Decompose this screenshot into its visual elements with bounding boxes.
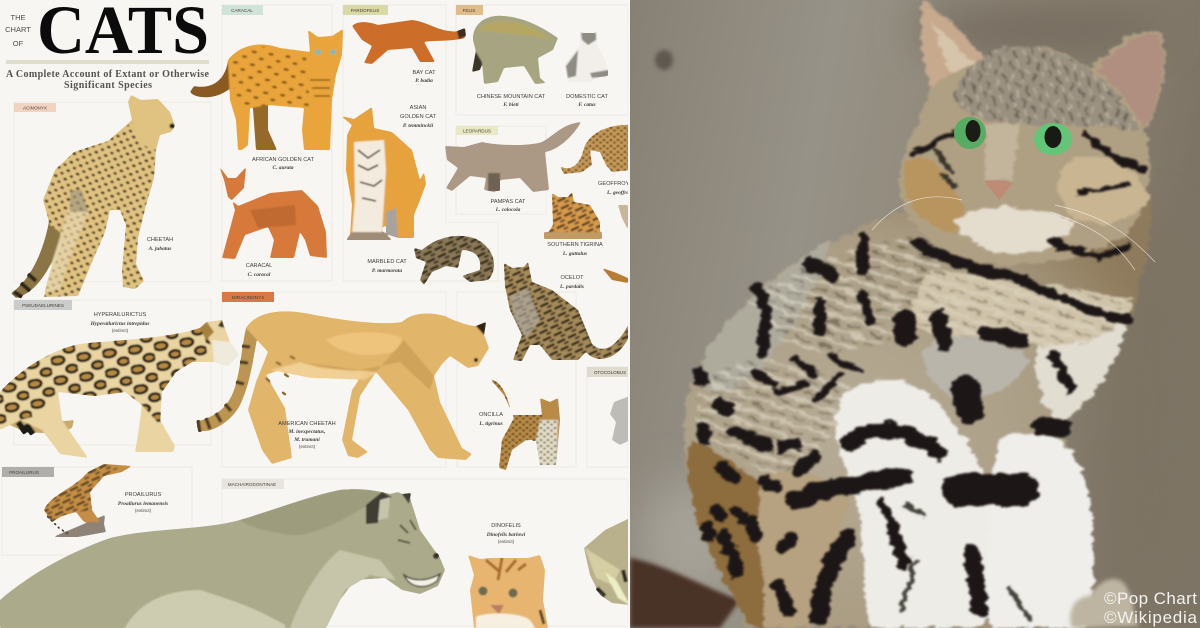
illustration: domestic cat	[565, 29, 608, 82]
subtitle: A Complete Account of Extant or Otherwise	[6, 69, 210, 80]
label: Asian golden cat: GOLDEN CAT	[400, 114, 437, 120]
label: Dinofelis: (extinct)	[498, 539, 515, 544]
cat nose	[984, 180, 1013, 200]
label: ocelot: L. pardalis	[559, 284, 584, 290]
photo: wooden branch	[630, 558, 740, 628]
label: Hyperailurictus	[90, 312, 149, 333]
label: Geoffroy's cat	[598, 181, 628, 195]
photo: paw at lower right	[1070, 579, 1140, 628]
label: oncilla: L. tigrinus	[478, 421, 503, 427]
label: southern tigrina: SOUTHERN TIGRINA	[547, 242, 603, 248]
illustration: Proailurus	[44, 464, 132, 537]
label: Proailurus	[118, 492, 168, 513]
illustration: Geoffroy's cat	[560, 125, 630, 174]
label: domestic cat: DOMESTIC CAT	[566, 94, 609, 100]
cat eyes	[954, 117, 1072, 155]
label: pampas cat: L. colocola	[495, 207, 521, 213]
taxonomy tags: PROAILURUS	[9, 470, 39, 475]
credit text: ©Pop Chart	[1104, 589, 1197, 608]
label: Proailurus: PROAILURUS	[125, 492, 161, 498]
illustration: ocelot	[504, 262, 630, 361]
cat stripes	[698, 134, 1142, 620]
label: Dinofelis: Dinofelis barlowi	[486, 532, 526, 538]
taxonomy tags: FELIS	[463, 8, 475, 13]
label: Hyperailurictus: Hyperailurictus intrepidus	[90, 321, 149, 327]
poster panel: chart of cats	[0, 0, 634, 628]
taxonomy tags: LEOPARDUS	[463, 128, 491, 134]
taxonomy tags: CARACAL	[231, 8, 253, 13]
label: pampas cat: PAMPAS CAT	[491, 199, 526, 205]
label: African golden cat	[252, 157, 314, 169]
illustration: Chinese mountain cat	[472, 16, 558, 84]
illustration: Pallas's cat fragment	[610, 396, 628, 445]
label: bay cat: P. badia	[415, 78, 433, 84]
label: Geoffroy's cat: L. geoffroyi	[606, 190, 633, 196]
illustration: cheetah	[11, 95, 175, 298]
illustration: caracal	[219, 166, 327, 259]
label: Dinofelis: DINOFELIS	[491, 523, 521, 529]
title: The Chart of Cats: CHART	[5, 25, 31, 34]
illustration: marbled cat	[414, 236, 494, 285]
label: cheetah: CHEETAH	[147, 237, 173, 243]
illustration: pampas cat	[445, 122, 581, 192]
label: domestic cat	[566, 94, 608, 106]
cat body	[684, 200, 1152, 628]
label: American cheetah	[278, 421, 336, 449]
label: Hyperailurictus: (extinct)	[112, 328, 129, 333]
taxonomy tags: PSEUDAELURINES	[22, 303, 64, 308]
label: Dinofelis	[486, 523, 526, 544]
label: Asian golden cat: ASIAN	[410, 105, 426, 111]
label: African golden cat: AFRICAN GOLDEN CAT	[252, 157, 315, 163]
illustration: southern tigrina	[544, 192, 602, 239]
taxonomy tags: MACHAIRODONTINAE	[228, 482, 276, 487]
label: bay cat	[412, 70, 436, 82]
cat head	[899, 1, 1165, 265]
label: Proailurus: Proailurus lemanensis	[118, 501, 168, 507]
label: bay cat: BAY CAT	[412, 70, 436, 76]
label: caracal	[246, 263, 272, 276]
label: American cheetah: M. inexpectatus,	[288, 429, 325, 435]
taxonomy tags: ACINONYX	[23, 106, 47, 110]
photo: black-footed cat	[684, 1, 1165, 628]
illustration: saber-toothed skull fragment	[584, 518, 630, 605]
label: Hyperailurictus: HYPERAILURICTUS	[94, 312, 147, 318]
label: African golden cat: C. aurata	[273, 165, 294, 171]
illustration: Dinofelis head	[468, 555, 548, 628]
title: The Chart of Cats: OF	[13, 39, 24, 48]
illustration: American cheetah	[197, 311, 489, 464]
label: marbled cat: MARBLED CAT	[367, 259, 407, 265]
taxonomy tags	[2, 5, 628, 489]
label: American cheetah: AMERICAN CHEETAH	[278, 421, 336, 427]
label: oncilla: ONCILLA	[479, 412, 503, 418]
label: American cheetah: M. trumani	[293, 437, 320, 443]
label: pampas cat	[491, 199, 526, 211]
label: southern tigrina: L. guttulus	[562, 251, 587, 257]
label: cheetah	[147, 237, 173, 252]
illustration: Hyperailurictus	[0, 320, 239, 458]
label: caracal: C. caracal	[248, 272, 271, 278]
label: Proailurus: (extinct)	[135, 508, 152, 513]
illustration: partial feline at edge	[602, 205, 628, 283]
illustration: bay cat	[352, 20, 466, 64]
credit text: ©Wikipedia	[1104, 608, 1198, 627]
credit text	[1104, 589, 1198, 627]
label: Chinese mountain cat	[477, 94, 545, 106]
label: southern tigrina	[547, 242, 603, 257]
label: Chinese mountain cat: CHINESE MOUNTAIN CAT	[477, 94, 546, 100]
label: oncilla	[479, 412, 503, 426]
illustration: Asian golden cat	[341, 107, 426, 240]
taxonomy tags: MIRACINONYX	[232, 295, 264, 300]
photo background	[630, 0, 1200, 628]
taxonomy tags: PARDOFELIS	[351, 8, 379, 13]
subtitle: Significant Species	[64, 80, 152, 91]
label: Asian golden cat: P. temminckii	[403, 123, 434, 129]
label: marbled cat	[368, 259, 407, 272]
title: The Chart of Cats: THE	[10, 13, 26, 22]
label: ocelot: OCELOT	[560, 275, 584, 281]
label: Chinese mountain cat: F. bieti	[503, 102, 519, 108]
illustration: sabertooth Machairodontinae	[0, 489, 445, 628]
label: Asian golden cat	[400, 105, 437, 129]
label: Geoffroy's cat: GEOFFROY'S	[598, 181, 634, 187]
label: ocelot	[560, 275, 584, 289]
illustration: African golden cat	[190, 29, 343, 150]
label: American cheetah: (extinct)	[299, 444, 316, 449]
label: domestic cat: F. catus	[578, 102, 596, 108]
label: marbled cat: P. marmorata	[372, 268, 402, 274]
illustration: oncilla	[491, 380, 560, 470]
taxonomy tags: OTOCOLOBUS	[594, 370, 626, 375]
whiskers	[872, 197, 1155, 270]
label: cheetah: A. jubatus	[148, 246, 171, 252]
subtitle	[6, 69, 210, 91]
label: caracal: CARACAL	[246, 263, 272, 269]
